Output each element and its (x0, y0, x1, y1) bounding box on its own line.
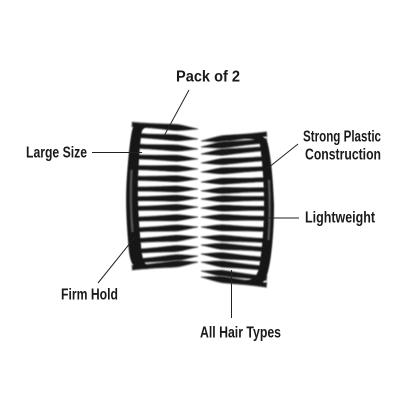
right comb teeth (201, 131, 267, 288)
callout: Large Size (26, 144, 142, 162)
callout: All Hair Types (200, 270, 281, 342)
callout: Pack of 2 (164, 68, 240, 136)
left comb spine highlight (131, 170, 132, 232)
callout: Strong Plastic Construction: Construction (305, 146, 381, 164)
left comb (126, 121, 198, 271)
right comb spine (245, 135, 274, 284)
right comb spine highlight (268, 180, 270, 240)
callout: Pack of 2: Pack of 2 (176, 68, 240, 86)
left comb spine (126, 123, 150, 269)
callout: Lightweight (266, 210, 375, 226)
callout: Firm Hold: Firm Hold (61, 286, 118, 304)
left comb teeth (132, 121, 198, 271)
callout: Firm Hold (61, 237, 135, 304)
callout: Strong Plastic Construction: Strong Plastic (303, 128, 381, 146)
callout: Lightweight: Lightweight (305, 210, 375, 226)
callout: All Hair Types: All Hair Types (200, 324, 281, 342)
callout: Strong Plastic Construction (268, 128, 381, 168)
callout: Large Size: Large Size (26, 144, 87, 162)
right comb (201, 131, 274, 288)
